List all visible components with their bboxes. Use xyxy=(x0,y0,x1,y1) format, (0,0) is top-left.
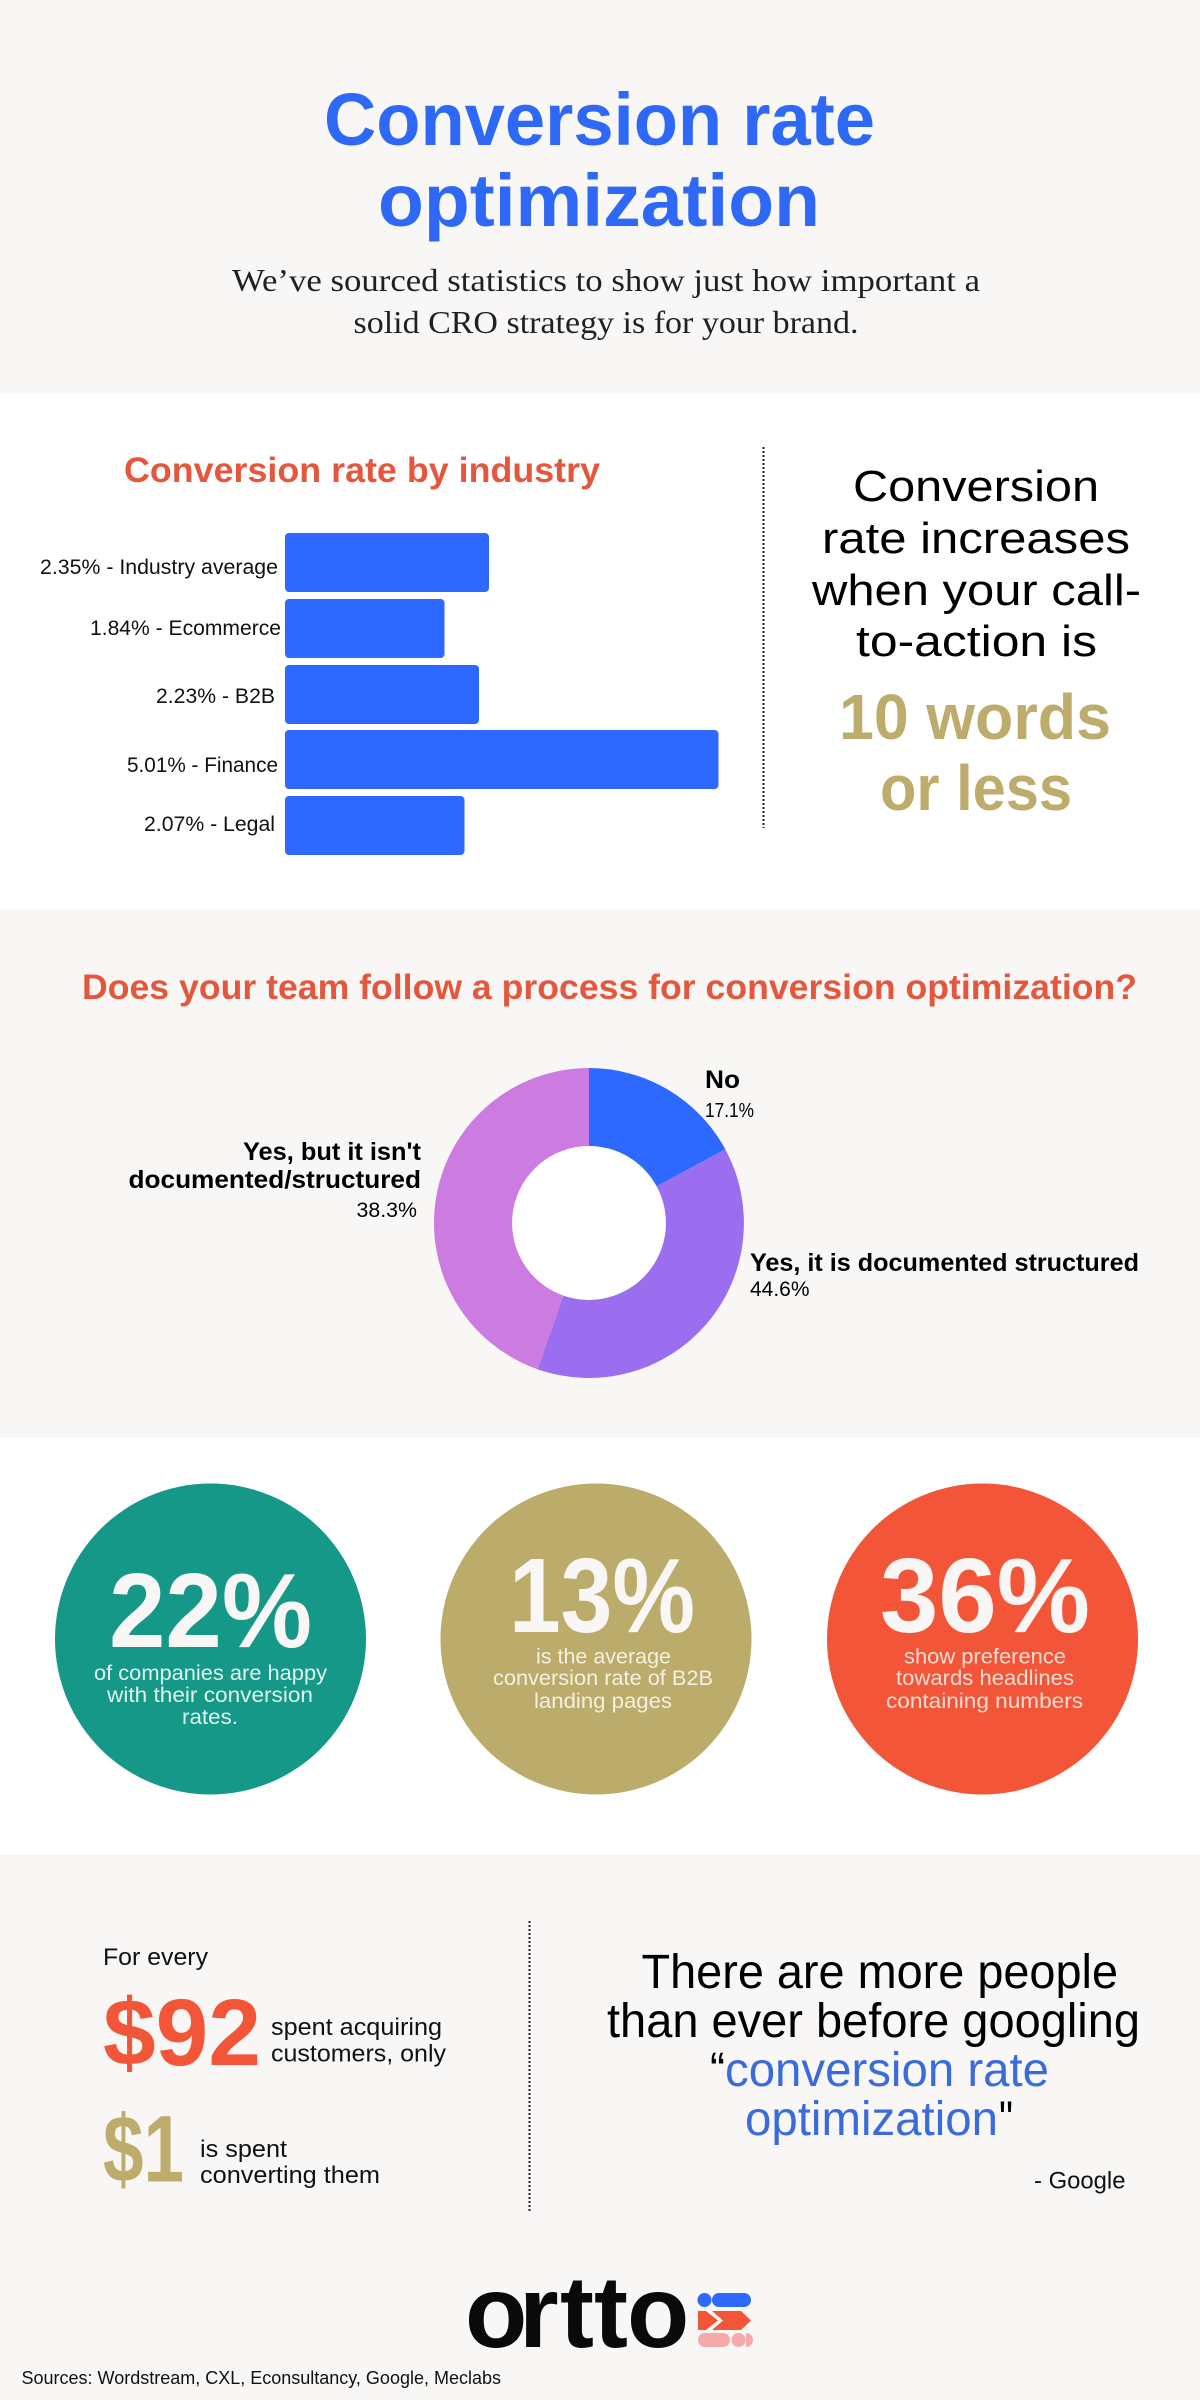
stat: $1 converting: is spent xyxy=(200,2136,287,2163)
quote attribution: - Google xyxy=(1034,2168,1126,2194)
callout: call-to-action statement: when your call- xyxy=(811,566,1141,615)
stat: $92 spent acquiring: spent acquiring xyxy=(271,2014,442,2041)
stat: $92 spent acquiring xyxy=(103,1980,446,2086)
quote: There are more people xyxy=(642,1946,1118,1999)
stat circle: 22%: rates. xyxy=(182,1706,238,1729)
stat circle: 13%: landing pages xyxy=(534,1690,672,1713)
stat: $92 spent acquiring: $92 xyxy=(103,1980,261,2086)
callout: call-to-action statement: Conversion xyxy=(853,462,1099,511)
title: optimization xyxy=(378,159,820,242)
logo: ortto: ortto xyxy=(465,2255,689,2369)
heading: process question: Does your team follow a process for conversion optimization? xyxy=(82,968,1137,1007)
stat circle: 22%: of companies are happy xyxy=(94,1662,328,1685)
stat circle: 36%: containing numbers xyxy=(886,1690,1083,1713)
bar: ecommerce: 1.84% - Ecommerce xyxy=(90,617,281,640)
bar: b2b: 2.23% - B2B xyxy=(156,685,275,708)
bar: legal xyxy=(144,796,464,855)
panel: header xyxy=(0,0,1200,393)
label: yes, documented: 44.6% xyxy=(750,1278,810,1301)
icon: ortto mark xyxy=(698,2293,753,2347)
label: yes, undocumented: Yes, but it isn't xyxy=(243,1138,422,1166)
label: yes, documented xyxy=(750,1249,1139,1301)
heading: conversion rate by industry: Conversion rate by industry xyxy=(124,451,601,490)
label: no: 17.1% xyxy=(705,1100,754,1122)
stat circle: 22% xyxy=(55,1484,366,1794)
label: yes, documented: Yes, it is documented structured xyxy=(750,1249,1139,1277)
title xyxy=(324,78,875,242)
bar: finance xyxy=(127,730,718,789)
stat: $1 converting: converting them xyxy=(200,2162,380,2189)
bar: industry average: 2.35% - Industry average xyxy=(40,556,278,579)
bar chart xyxy=(40,533,718,855)
stat circle: 36%: 36% xyxy=(880,1537,1090,1655)
subtitle xyxy=(232,262,980,340)
bar: finance: 5.01% - Finance xyxy=(127,754,278,777)
bar: industry average xyxy=(40,533,489,592)
panel: footer statistics xyxy=(0,1854,1200,2400)
bar: legal: 2.07% - Legal xyxy=(144,813,275,836)
stat circle: 36% xyxy=(827,1484,1138,1794)
label: no xyxy=(705,1066,754,1122)
quote: " xyxy=(999,2093,1013,2146)
sources: Sources: Wordstream, CXL, Econsultancy, Google, Meclabs xyxy=(22,2368,501,2388)
callout: 10 words or less: 10 words xyxy=(839,681,1111,753)
label: yes, undocumented: documented/structured xyxy=(128,1166,421,1194)
label: yes, undocumented: 38.3% xyxy=(356,1199,417,1222)
callout: call-to-action statement: rate increases xyxy=(822,514,1130,563)
stat: $1 converting: $1 xyxy=(103,2096,184,2202)
label: yes, undocumented xyxy=(128,1138,422,1222)
quote xyxy=(607,1946,1140,2146)
panel: stat circles xyxy=(0,1438,1200,1854)
bar: ecommerce xyxy=(90,599,444,658)
title: Conversion rate xyxy=(324,78,875,161)
subtitle: We’ve sourced statistics to show just how important a xyxy=(232,262,980,298)
panel: conversion rate by industry xyxy=(0,393,1200,909)
quote: than ever before googling xyxy=(607,1995,1140,2048)
callout: call-to-action statement: to-action is xyxy=(856,617,1097,666)
stat: $1 converting xyxy=(103,2096,380,2202)
stat circle: 13%: conversion rate of B2B xyxy=(493,1667,713,1690)
stat circle: 13%: is the average xyxy=(536,1646,671,1668)
quote: conversion rate xyxy=(725,2044,1049,2097)
stat: $92 spent acquiring: customers, only xyxy=(271,2040,446,2068)
subtitle: solid CRO strategy is for your brand. xyxy=(354,304,858,340)
stat circle: 13% xyxy=(440,1484,752,1794)
callout: call-to-action statement xyxy=(811,462,1141,666)
label: no: No xyxy=(705,1066,740,1094)
stat circle: 36%: show preference xyxy=(904,1646,1066,1668)
callout: 10 words or less: or less xyxy=(880,752,1072,824)
bar: b2b xyxy=(156,665,479,724)
panel: process survey xyxy=(0,909,1200,1438)
quote: “ xyxy=(710,2044,725,2097)
stat circle: 22%: with their conversion xyxy=(106,1684,313,1707)
callout: 10 words or less xyxy=(839,681,1111,824)
stat circle: 22%: 22% xyxy=(109,1552,312,1670)
quote: optimization xyxy=(745,2093,998,2146)
donut chart xyxy=(434,1068,744,1378)
stat circle: 13%: 13% xyxy=(509,1537,695,1655)
stat circle: 36%: towards headlines xyxy=(896,1667,1074,1690)
text: for every: For every xyxy=(103,1944,208,1971)
